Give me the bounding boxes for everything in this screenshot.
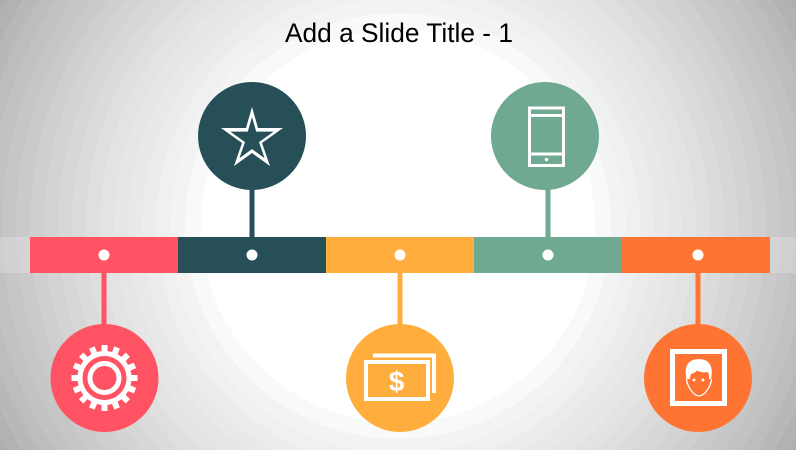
icon: phone bbox=[530, 108, 564, 166]
icon: star bbox=[221, 107, 283, 166]
milestone: gear bbox=[50, 273, 158, 432]
icon: portrait bbox=[672, 352, 724, 404]
milestone: phone bbox=[491, 82, 599, 237]
milestone: star bbox=[198, 82, 306, 237]
icon: money: $ bbox=[389, 366, 405, 397]
milestone: portrait bbox=[644, 273, 752, 432]
timeline bar bbox=[30, 237, 770, 273]
icon: gear bbox=[72, 345, 138, 411]
title: Add a Slide Title - 1 bbox=[285, 18, 513, 48]
icon: money bbox=[366, 356, 434, 399]
milestone: money bbox=[346, 273, 454, 432]
